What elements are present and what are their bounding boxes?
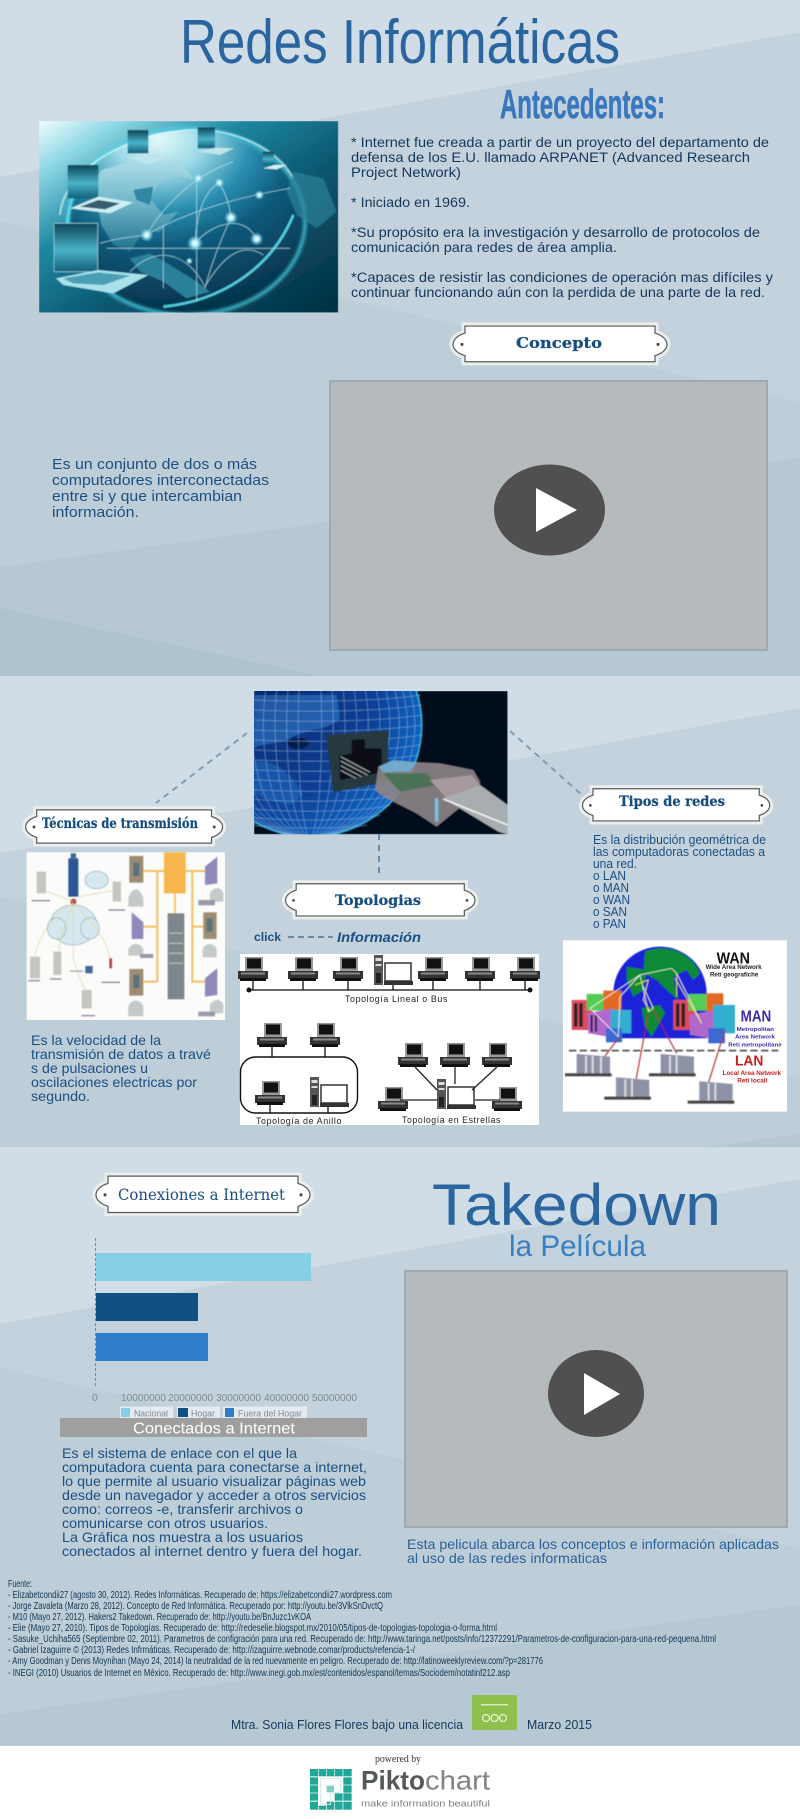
text block: antecedentes: *Capaces de resistir las condiciones de operación mas difíciles y xyxy=(351,269,773,285)
text block: técnicas: segundo. xyxy=(31,1088,90,1104)
link: click información: Información xyxy=(337,929,421,945)
video: takedown xyxy=(405,1271,787,1527)
footer white band xyxy=(0,1746,800,1819)
network arcs xyxy=(100,162,290,302)
text block: fuentes: - Gabriel Izaguirre © (2013) Redes Infrmáticas. Recuperado de: http://izaguirre.webnode.comar/products/refencia-1-/ xyxy=(8,1645,415,1656)
banner: Conexiones a Internet: Conexiones a Internet xyxy=(118,1186,286,1204)
bar chart: conectados a internet xyxy=(60,1238,367,1438)
text block: antecedentes: defensa de los E.U. llamado ARPANET (Advanced Research xyxy=(351,149,750,165)
icon: logo mark xyxy=(310,1769,352,1810)
dashed connector center xyxy=(378,834,380,878)
link: click información xyxy=(254,929,421,945)
network labels: WAN xyxy=(717,950,750,967)
legend: Nacional xyxy=(134,1408,168,1420)
ring topology: Topología de Anillo xyxy=(256,1116,342,1126)
section 1 background xyxy=(0,0,800,676)
text block: tipos de redes: o PAN xyxy=(593,916,626,931)
buildings xyxy=(572,991,735,1043)
banner: Técnicas de transmisión xyxy=(26,810,223,843)
text block: técnicas: transmisión de datos a travé xyxy=(31,1046,211,1062)
axis labels: 40000000 xyxy=(264,1392,309,1404)
legend: Hogar xyxy=(191,1408,215,1420)
credit line: Mtra. Sonia Flores Flores bajo una licencia xyxy=(231,1717,464,1732)
laptops xyxy=(54,127,287,293)
text block: fuentes xyxy=(8,1579,716,1679)
text block: concepto xyxy=(52,456,269,521)
banner: Concepto: Concepto xyxy=(516,334,602,352)
text block: conexiones: computadora cuenta para conectarse a internet, xyxy=(62,1459,367,1475)
text block: técnicas: Es la velocidad de la xyxy=(31,1032,161,1048)
text block: conexiones: La Gráfica nos muestra a los usuarios xyxy=(62,1529,303,1545)
grid xyxy=(254,691,423,834)
star topology xyxy=(378,1043,522,1125)
text block: fuentes: - Amy Goodman y Denis Moynihan (Mayo 24, 2014) la neutralidad de la red nuevamente en peligro. Recuperado de: http://latinoweeklyreview.com/?p=281776 xyxy=(8,1656,543,1667)
title: Redes Informáticas xyxy=(180,8,620,77)
text block: conexiones: comunicarse con otros usuarios. xyxy=(62,1515,268,1531)
banner: Topologias xyxy=(286,884,475,916)
bus topology xyxy=(238,955,540,1004)
text block: fuentes: - Jorge Zavaleta (Marzo 28, 2012). Concepto de Red Informática. Recuperado por: http://youtu.be/3VlkSnDvctQ xyxy=(8,1601,383,1612)
plug xyxy=(375,761,480,827)
axis labels xyxy=(92,1392,357,1404)
text block: antecedentes: *Su propósito era la investigación y desarrollo de protocolos de xyxy=(351,224,760,240)
text block: antecedentes xyxy=(351,134,773,300)
bar: Hogar xyxy=(96,1293,198,1321)
image: WAN MAN LAN diagram xyxy=(563,940,787,1112)
text block: película xyxy=(407,1536,779,1566)
text block: fuentes: - Elie (Mayo 27, 2010). Tipos de Topologías. Recuperado de: http://redeselie.blogspot.mx/2010/05/tipos-de-topologias-topologia-o-forma.html xyxy=(8,1623,497,1634)
text block: concepto: información. xyxy=(52,504,139,521)
glowing nodes xyxy=(140,174,264,264)
banner: Técnicas de transmisión: Técnicas de transmisión xyxy=(42,816,198,832)
text block: tipos de redes xyxy=(593,832,766,931)
text block: antecedentes: comunicación para redes de área amplia. xyxy=(351,239,617,255)
dashed connector right xyxy=(510,731,582,795)
axis labels: 30000000 xyxy=(216,1392,261,1404)
orange connection lines xyxy=(143,871,213,982)
text block: técnicas: s de pulsaciones u xyxy=(31,1060,148,1076)
image: WAN MAN LAN diagram: LAN xyxy=(735,1054,763,1070)
image: WAN MAN LAN diagram: Wide Area Network xyxy=(706,965,762,971)
powered by: powered by xyxy=(375,1754,421,1765)
axis labels: 50000000 xyxy=(312,1392,357,1404)
text block: película: Esta pelicula abarca los conceptos e información aplicadas xyxy=(407,1536,779,1552)
logo: Piktochart: Pikto xyxy=(361,1765,425,1795)
banner: Concepto xyxy=(453,326,667,362)
text block: conexiones xyxy=(62,1445,367,1559)
text block: tipos de redes: Es la distribución geométrica de xyxy=(593,832,766,847)
logo: Piktochart: make information beautiful xyxy=(361,1799,490,1809)
heading: Antecedentes: Antecedentes: xyxy=(500,81,665,127)
chart title bar: Conectados a Internet xyxy=(133,1420,296,1438)
bar: Fuera del Hogar xyxy=(96,1333,208,1361)
banner: Conexiones a Internet xyxy=(96,1176,310,1213)
text block: fuentes: - M10 (Mayo 27, 2012). Hakers2 Takedown. Recuperado de: http://youtu.be/BnJuzc1vKOA xyxy=(8,1612,311,1623)
image: WAN MAN LAN diagram: Metropolitan xyxy=(737,1027,775,1033)
image: transmission diagram xyxy=(27,852,225,1020)
text block: antecedentes: * Iniciado en 1969. xyxy=(351,194,470,210)
text block: antecedentes: * Internet fue creada a partir de un proyecto del departamento de xyxy=(351,134,769,150)
section 2 background xyxy=(0,676,800,1147)
banner: Tipos de redes: Tipos de redes xyxy=(619,794,725,810)
text block: técnicas xyxy=(31,1032,211,1104)
text block: tipos de redes: o LAN xyxy=(593,868,626,883)
subheading: la Película: la Película xyxy=(509,1230,646,1263)
continents xyxy=(93,157,195,252)
axis labels: 0 xyxy=(92,1392,98,1404)
text block: antecedentes: Project Network) xyxy=(351,164,461,180)
text block: película: al uso de las redes informaticas xyxy=(407,1550,607,1566)
star topology: Topología en Estrellas xyxy=(402,1115,501,1125)
text block: tipos de redes: una red. xyxy=(593,856,637,871)
text block: tipos de redes: o MAN xyxy=(593,880,629,895)
image: WAN MAN LAN diagram: Reti locali xyxy=(737,1078,768,1084)
dashed connector left xyxy=(156,733,247,803)
bus topology: Topología Lineal o Bus xyxy=(345,994,448,1004)
text block: tipos de redes: las computadoras conectadas a xyxy=(593,844,766,859)
text block: tipos de redes: o WAN xyxy=(593,892,630,907)
video: concepto xyxy=(330,381,767,650)
icon: license badge xyxy=(472,1695,517,1730)
image: WAN MAN LAN diagram: MAN xyxy=(741,1009,771,1026)
text block: conexiones: como: correos -e, transferir archivos o xyxy=(62,1501,303,1517)
legend xyxy=(120,1406,307,1420)
axis labels: 10000000 xyxy=(121,1392,166,1404)
banner: Topologias: Topologias xyxy=(335,893,421,909)
text block: fuentes: - Elizabetcondii27 (agosto 30, 2012). Redes Informáticas. Recuperado de: https://elizabetcondii27.wordpress.com xyxy=(8,1590,392,1601)
image: globe with laptops xyxy=(39,121,338,315)
chart title bar xyxy=(60,1418,367,1438)
image: RJ45 globe xyxy=(254,691,508,834)
text block: concepto: Es un conjunto de dos o más xyxy=(52,456,257,473)
image: WAN MAN LAN diagram: Reti geografiche xyxy=(710,972,759,978)
text block: conexiones: desde un navegador y acceder a otros servicios xyxy=(62,1487,366,1503)
text block: fuentes: - INEGI (2010) Usuarios de Internet en México. Recuperado de: http://www.inegi.gob.mx/est/contenidos/espanol/temas/Sociodem/notatinf212.asp xyxy=(8,1668,510,1679)
ring topology xyxy=(240,1023,358,1126)
text block: conexiones: conectados al internet dentro y fuera del hogar. xyxy=(62,1543,362,1559)
legend: Fuera del Hogar xyxy=(238,1408,302,1420)
banner: Tipos de redes xyxy=(582,789,770,821)
image: WAN MAN LAN diagram: Local Area Network xyxy=(723,1071,782,1077)
heading: Takedown: Takedown xyxy=(432,1173,721,1238)
socket xyxy=(326,730,388,792)
image: topologies xyxy=(238,954,540,1126)
text block: concepto: computadores interconectadas xyxy=(52,472,269,489)
logo: Piktochart xyxy=(310,1765,491,1810)
text block: conexiones: Es el sistema de enlace con el que la xyxy=(62,1445,297,1461)
logo: Piktochart: chart xyxy=(425,1765,491,1795)
text block: antecedentes: continuar funcionando aún con la perdida de una parte de la red. xyxy=(351,284,765,300)
section 3 background xyxy=(0,1147,800,1746)
text block: conexiones: lo que permite al usuario visualizar páginas web xyxy=(62,1473,366,1489)
text block: técnicas: oscilaciones electricas por xyxy=(31,1074,197,1090)
text block: fuentes: Fuente: xyxy=(8,1579,32,1590)
image: WAN MAN LAN diagram: Area Network xyxy=(735,1035,776,1041)
axis labels: 20000000 xyxy=(168,1392,213,1404)
text block: tipos de redes: o SAN xyxy=(593,904,627,919)
bar: Nacional xyxy=(96,1253,311,1281)
link: click información: click xyxy=(254,932,282,944)
date: Marzo 2015 xyxy=(527,1717,592,1732)
image: WAN MAN LAN diagram: Reti metropolitane xyxy=(728,1042,782,1048)
network links xyxy=(590,968,702,1037)
text block: concepto: entre si y que intercambian xyxy=(52,488,242,505)
